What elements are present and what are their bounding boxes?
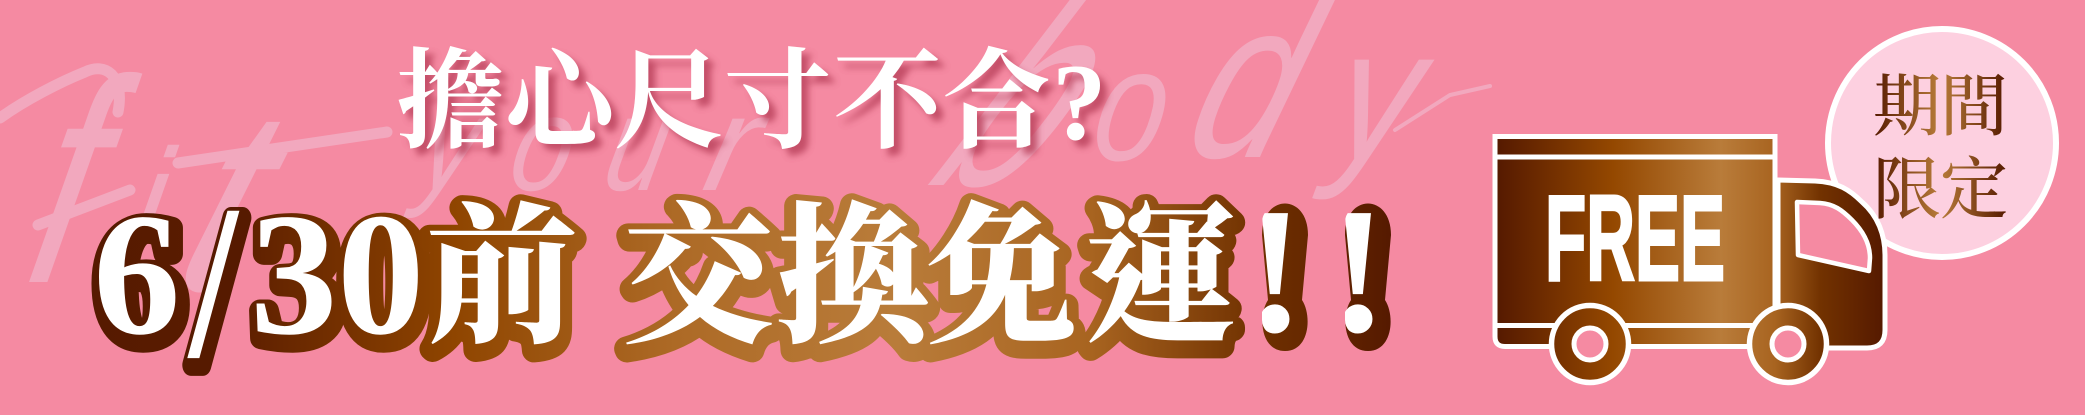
truck box	[1495, 136, 1775, 346]
box stripes	[1497, 157, 1773, 326]
truck cab	[1778, 180, 1885, 348]
title white layer: 前交換免運	[426, 195, 1237, 363]
title outline layer: /	[191, 168, 243, 412]
watermark script: fit your body: o	[1082, 16, 1185, 194]
watermark script: fit your body	[0, 0, 1490, 345]
title white layer: /	[187, 161, 240, 405]
title white layer: !!	[1245, 171, 1388, 370]
title outline layer: 630	[96, 184, 428, 378]
watermark script: fit your body: u	[594, 69, 686, 219]
truck window	[1797, 202, 1870, 271]
title outline layer	[96, 168, 1391, 412]
watermark script: fit your body: o	[499, 69, 591, 219]
watermark script: fit your body: r	[694, 69, 781, 219]
front wheel	[1750, 306, 1826, 382]
main title: 6/30前 交換免運!!	[92, 193, 1391, 376]
title white layer	[99, 199, 1372, 358]
icon: delivery truck	[1495, 136, 1885, 382]
badge: limited time	[1828, 29, 2056, 257]
headline: 擔心尺寸不合?: 擔心尺寸不合?	[396, 42, 1106, 163]
watermark script: fit your body: t	[152, 55, 320, 345]
rear wheel	[1552, 306, 1628, 382]
badge text: 限定	[1873, 152, 2008, 228]
headline: 擔心尺寸不合?: 擔心尺寸不合?	[403, 49, 1114, 170]
watermark script: fit your body: y	[402, 69, 501, 219]
title white layer: 630	[93, 177, 424, 371]
watermark script: fit your body: i	[122, 119, 184, 284]
title outline layer: 前交換免運	[426, 201, 1237, 369]
badge text	[1873, 69, 2008, 228]
FREE label: FREE	[1545, 170, 1725, 306]
badge text: 期間	[1873, 69, 2008, 145]
watermark script: fit your body: f	[9, 21, 156, 344]
